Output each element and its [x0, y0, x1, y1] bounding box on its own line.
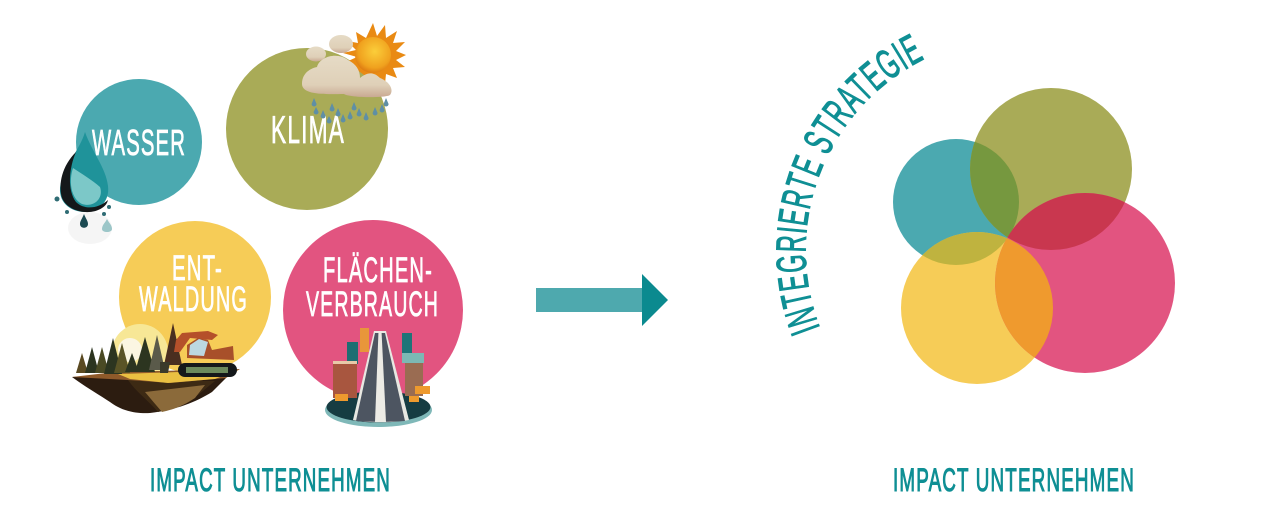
- circle: Klima: KLIMA: [271, 109, 345, 152]
- icon: sun with clouds and rain: [302, 23, 406, 124]
- icon: city road: [325, 328, 432, 427]
- circle: Klima: [226, 48, 388, 210]
- circle: Flaechenverbrauch: [283, 220, 463, 400]
- heading: curved: INTEGRIERTE STRATEGIE: [776, 33, 924, 336]
- circle: Flaechenverbrauch: FLÄCHEN-: [323, 251, 433, 290]
- caption: left: IMPACT UNTERNEHMEN: [150, 462, 391, 498]
- circle: Entwaldung: ENT-: [172, 249, 223, 288]
- circle: Wasser: WASSER: [92, 122, 186, 163]
- circle: Entwaldung: WALDUNG: [139, 280, 248, 319]
- circle: Flaechenverbrauch: VERBRAUCH: [306, 285, 439, 324]
- arrow: [536, 274, 668, 326]
- circle: Wasser: [76, 79, 202, 205]
- circle: Entwaldung: [119, 221, 271, 373]
- venn diagram: [893, 88, 1175, 384]
- icon: water drop: [54, 132, 112, 244]
- icon: deforestation island: [72, 323, 240, 413]
